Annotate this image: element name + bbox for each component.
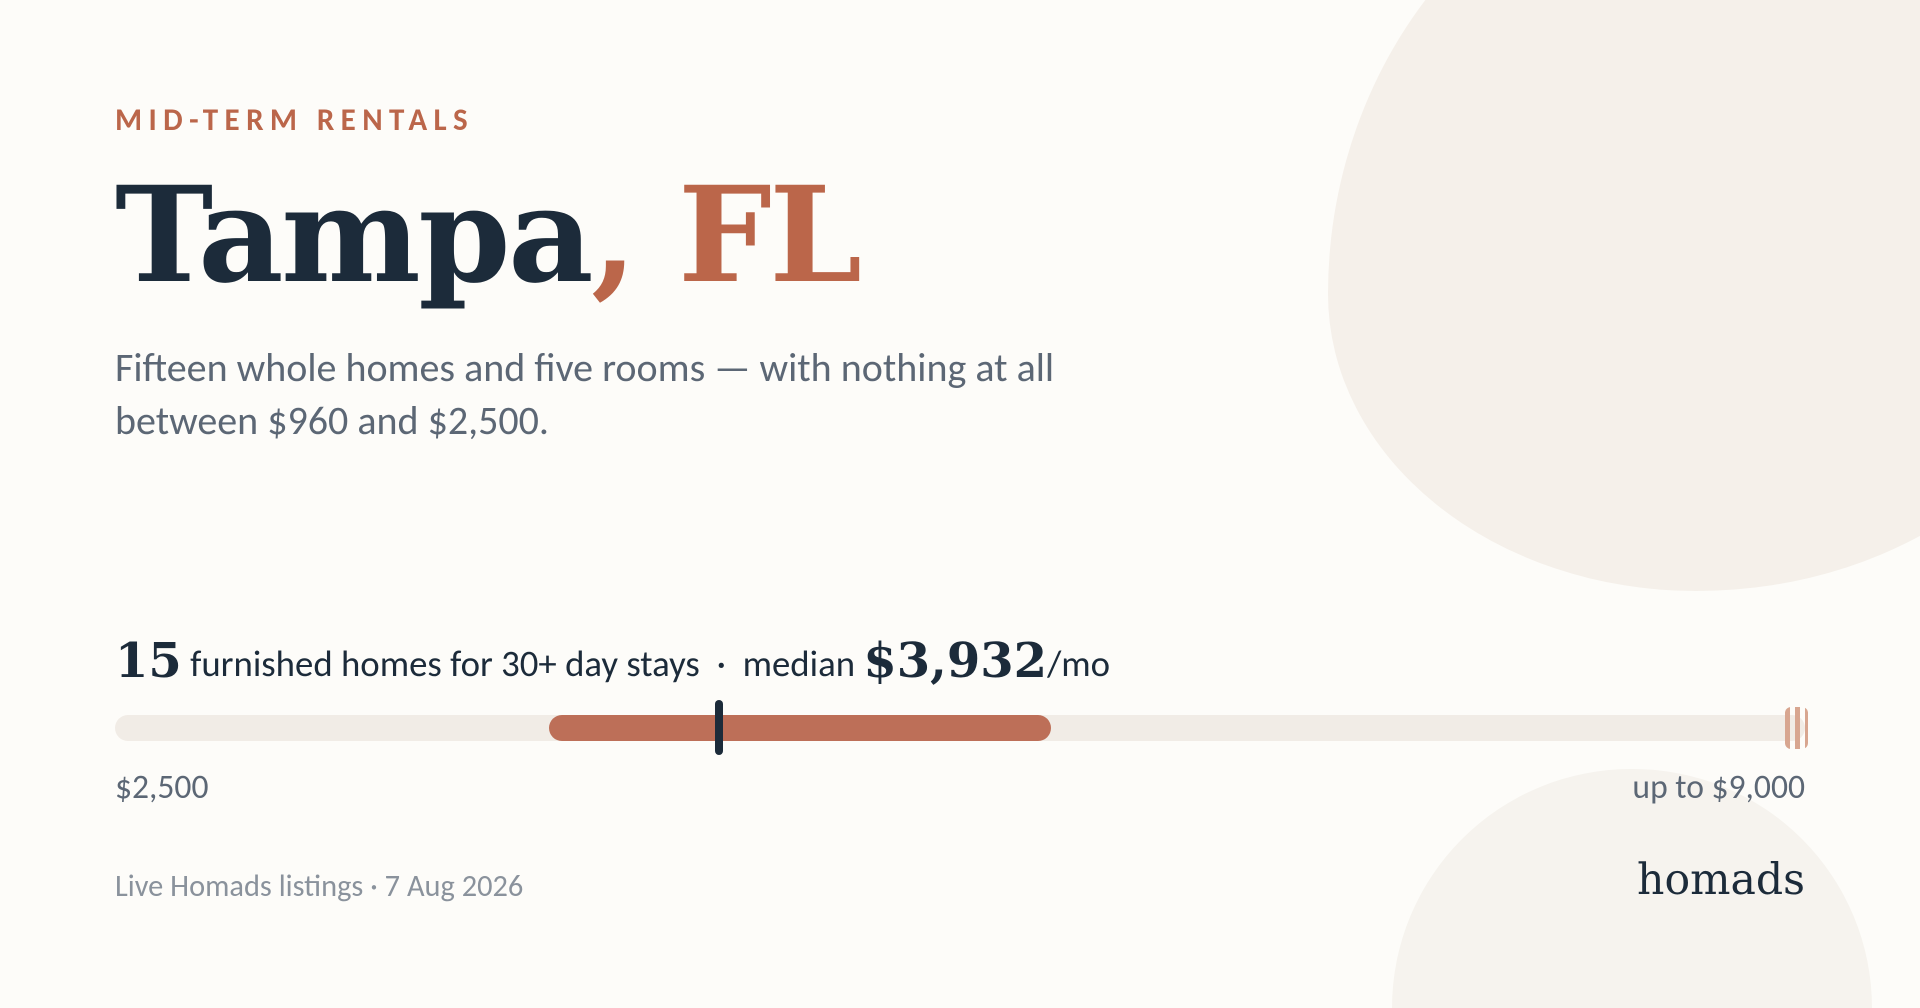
bar fill: price range	[549, 715, 1051, 741]
brand wordmark: homads	[1637, 855, 1805, 905]
bar track	[115, 715, 1805, 741]
subtitle	[115, 343, 1054, 445]
subtitle: between $960 and $2,500.	[115, 396, 549, 445]
outlier ticks	[1785, 707, 1808, 749]
price range bar	[115, 700, 1808, 755]
axis label: maximum: up to $9,000	[1632, 767, 1805, 808]
summary stats line: 15 furnished homes for 30+ day stays · median $3,932/mo	[115, 633, 1110, 689]
decorative blob: bottom right	[1392, 769, 1872, 1008]
median marker	[715, 700, 723, 755]
axis label: minimum: $2,500	[115, 767, 208, 808]
decorative blob: top right	[1328, 0, 1920, 591]
source note: Live Homads listings · 7 Aug 2026	[115, 868, 523, 905]
title: Tampa, FL	[115, 158, 860, 313]
eyebrow label: MID-TERM RENTALS	[115, 101, 474, 139]
subtitle: Fifteen whole homes and five rooms — with nothing at all	[115, 343, 1054, 392]
